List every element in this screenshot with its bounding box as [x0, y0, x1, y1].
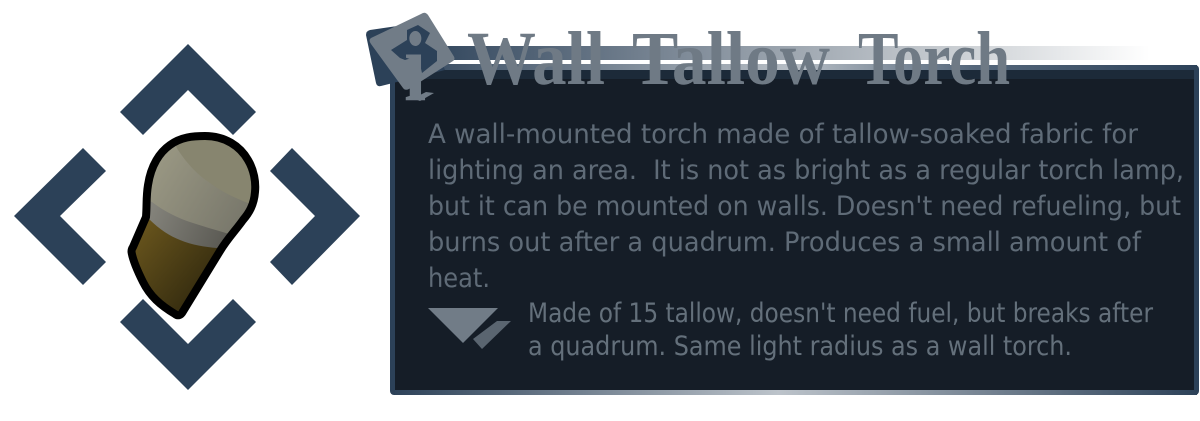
- icon: info badge: [366, 11, 454, 122]
- arrow: right chevron: [270, 148, 360, 285]
- arrow: bottom chevron: [120, 299, 256, 390]
- text block: description: burns out after a quadrum. Produces a small amount of: [428, 227, 1143, 258]
- icon: directional chevrons: [14, 44, 360, 390]
- text block: note: a quadrum. Same light radius as a wall torch.: [528, 331, 1072, 362]
- text block: note: [528, 298, 1153, 362]
- text block: description: A wall-mounted torch made of tallow-soaked fabric for: [428, 119, 1138, 150]
- title: Torch: [858, 17, 1010, 101]
- icon: note marker: [428, 308, 511, 349]
- arrow: left chevron: [14, 148, 106, 285]
- text block: description: heat.: [428, 263, 490, 294]
- title: Wall: [467, 17, 605, 101]
- title band: [420, 46, 1150, 69]
- text block: description: [428, 119, 1184, 294]
- title: Tallow: [632, 17, 830, 101]
- title: [467, 17, 1010, 101]
- panel: description: [390, 65, 1199, 395]
- text block: note: Made of 15 tallow, doesn't need fuel, but breaks after: [528, 298, 1153, 329]
- letter: i: i: [404, 11, 426, 122]
- text block: description: but it can be mounted on walls. Doesn't need refueling, but: [428, 191, 1181, 222]
- text block: description: lighting an area. It is not as bright as a regular torch lamp,: [428, 155, 1184, 186]
- arrow: top chevron: [120, 44, 256, 135]
- icon: tallow torch: [128, 132, 260, 320]
